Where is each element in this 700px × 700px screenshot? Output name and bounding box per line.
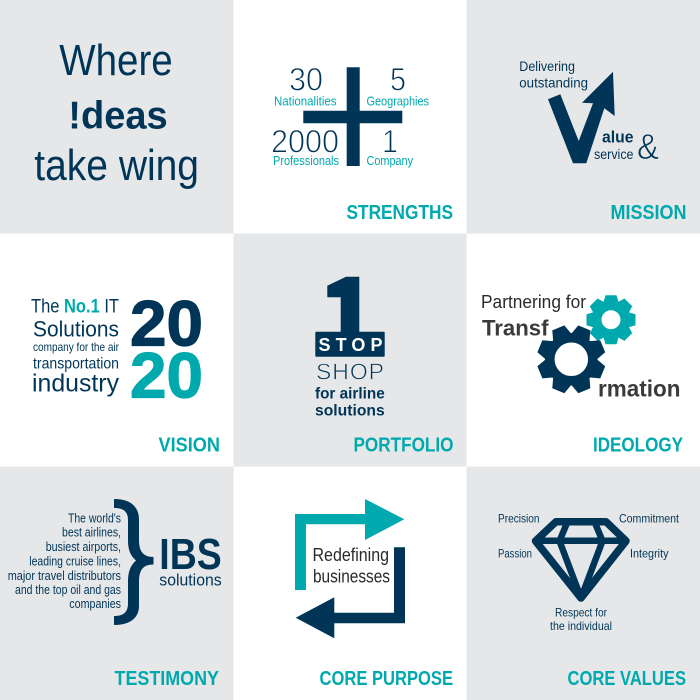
icon: teal arrow [295,499,404,590]
label: strengths: STRENGTHS [346,202,453,224]
year: 2020: 20 [130,339,203,411]
panel: mission [466,0,700,234]
year: 2020 [130,288,203,411]
heading: where ideas take wing: !deas [68,94,168,137]
text: delivering outstanding: outstanding [519,75,588,91]
text: customer list: and the top oil and gas [15,583,121,597]
text: customer list: leading cruise lines, [29,554,121,568]
text: value and service [594,126,659,167]
text: redefining businesses: Redefining [312,545,389,565]
text: values: the individual [550,619,612,633]
stat: 30 nationalities [274,62,336,109]
stat: 2000 professionals: 2000 [271,124,339,160]
text: the no.1 IT solutions company: company for the air [33,340,119,354]
panel: testimony [0,466,234,700]
logo: IBS solutions: solutions [159,571,222,590]
text: redefining businesses [312,545,390,587]
stat: 1 company: Company [366,154,414,168]
text: customer list: The world's [68,511,121,525]
text: values: Precision [498,512,540,526]
label: ideology: IDEOLOGY [593,435,684,457]
icon: V arrow [548,72,615,163]
label: vision: VISION [158,435,220,457]
text: customer list [8,511,121,611]
stat: 2000 professionals: Professionals [273,154,339,168]
stat: 30 nationalities: 30 [289,62,323,98]
text: values [498,512,680,633]
stat: 1 company: 1 [382,124,398,160]
panel: core purpose [234,466,466,700]
text: customer list: major travel distributors [8,569,121,583]
label: core purpose: CORE PURPOSE [320,668,453,690]
label: testimony: TESTIMONY [114,668,220,690]
stat: 5 geographies: Geographies [366,95,429,109]
logo: IBS solutions: IBS [159,530,222,579]
text: partnering for transformation: rmation [598,376,680,402]
stat: 30 nationalities: Nationalities [274,95,336,109]
label: mission: MISSION [610,202,686,224]
text: values: Respect for [555,606,607,620]
text: value and service: alue [602,128,634,147]
text: the no.1 IT solutions company: industry [32,370,119,398]
text: values: Passion [498,546,532,560]
text: delivering outstanding [519,58,588,91]
text: the no.1 IT solutions company: transportation [33,355,119,372]
badge: stop: STOP [318,335,382,355]
icon: numeral one [327,277,359,332]
stat: 5 geographies [366,62,429,109]
text: partnering for transformation [481,292,680,402]
text: the no.1 IT solutions company [31,297,119,398]
text: shop for airline solutions: SHOP [316,358,384,384]
panel: strengths [234,0,466,234]
text: partnering for transformation: Partnering for [481,292,586,312]
text: value and service: & [637,126,659,167]
text: values: Commitment [619,512,680,526]
icon: curly brace [114,499,154,625]
text: customer list: busiest airports, [46,540,121,554]
heading: where ideas take wing [34,36,199,190]
label: portfolio: PORTFOLIO [354,435,454,457]
icon: diamond [536,522,626,598]
text: shop for airline solutions [315,358,385,420]
panel: portfolio [234,234,466,466]
text: partnering for transformation: Transf [482,316,549,341]
text: shop for airline solutions: for airline [315,385,385,402]
panel: ideology [466,234,700,466]
heading: where ideas take wing: take wing [34,141,199,190]
stat: 1 company [366,124,414,168]
icon: navy gear [536,324,607,395]
stat: 5 geographies: 5 [390,62,406,98]
text: customer list: best airlines, [62,526,121,540]
text: value and service: service [594,146,634,162]
text: delivering outstanding: Delivering [519,58,575,74]
icon: plus sign [303,67,402,166]
heading: where ideas take wing: Where [59,36,173,85]
text: shop for airline solutions: solutions [315,403,385,420]
text: values: Integrity [630,546,668,560]
panel: vision [0,234,234,466]
panel: title [0,0,234,234]
year: 2020: 20 [130,288,203,360]
icon: teal gear [586,295,636,344]
panel: core values [466,466,700,700]
text: the no.1 IT solutions company: The No.1 IT [31,297,119,318]
text: customer list: companies [69,597,121,611]
icon: navy arrow [296,547,405,638]
text: the no.1 IT solutions company: Solutions [33,317,119,342]
text: redefining businesses: businesses [313,567,390,587]
